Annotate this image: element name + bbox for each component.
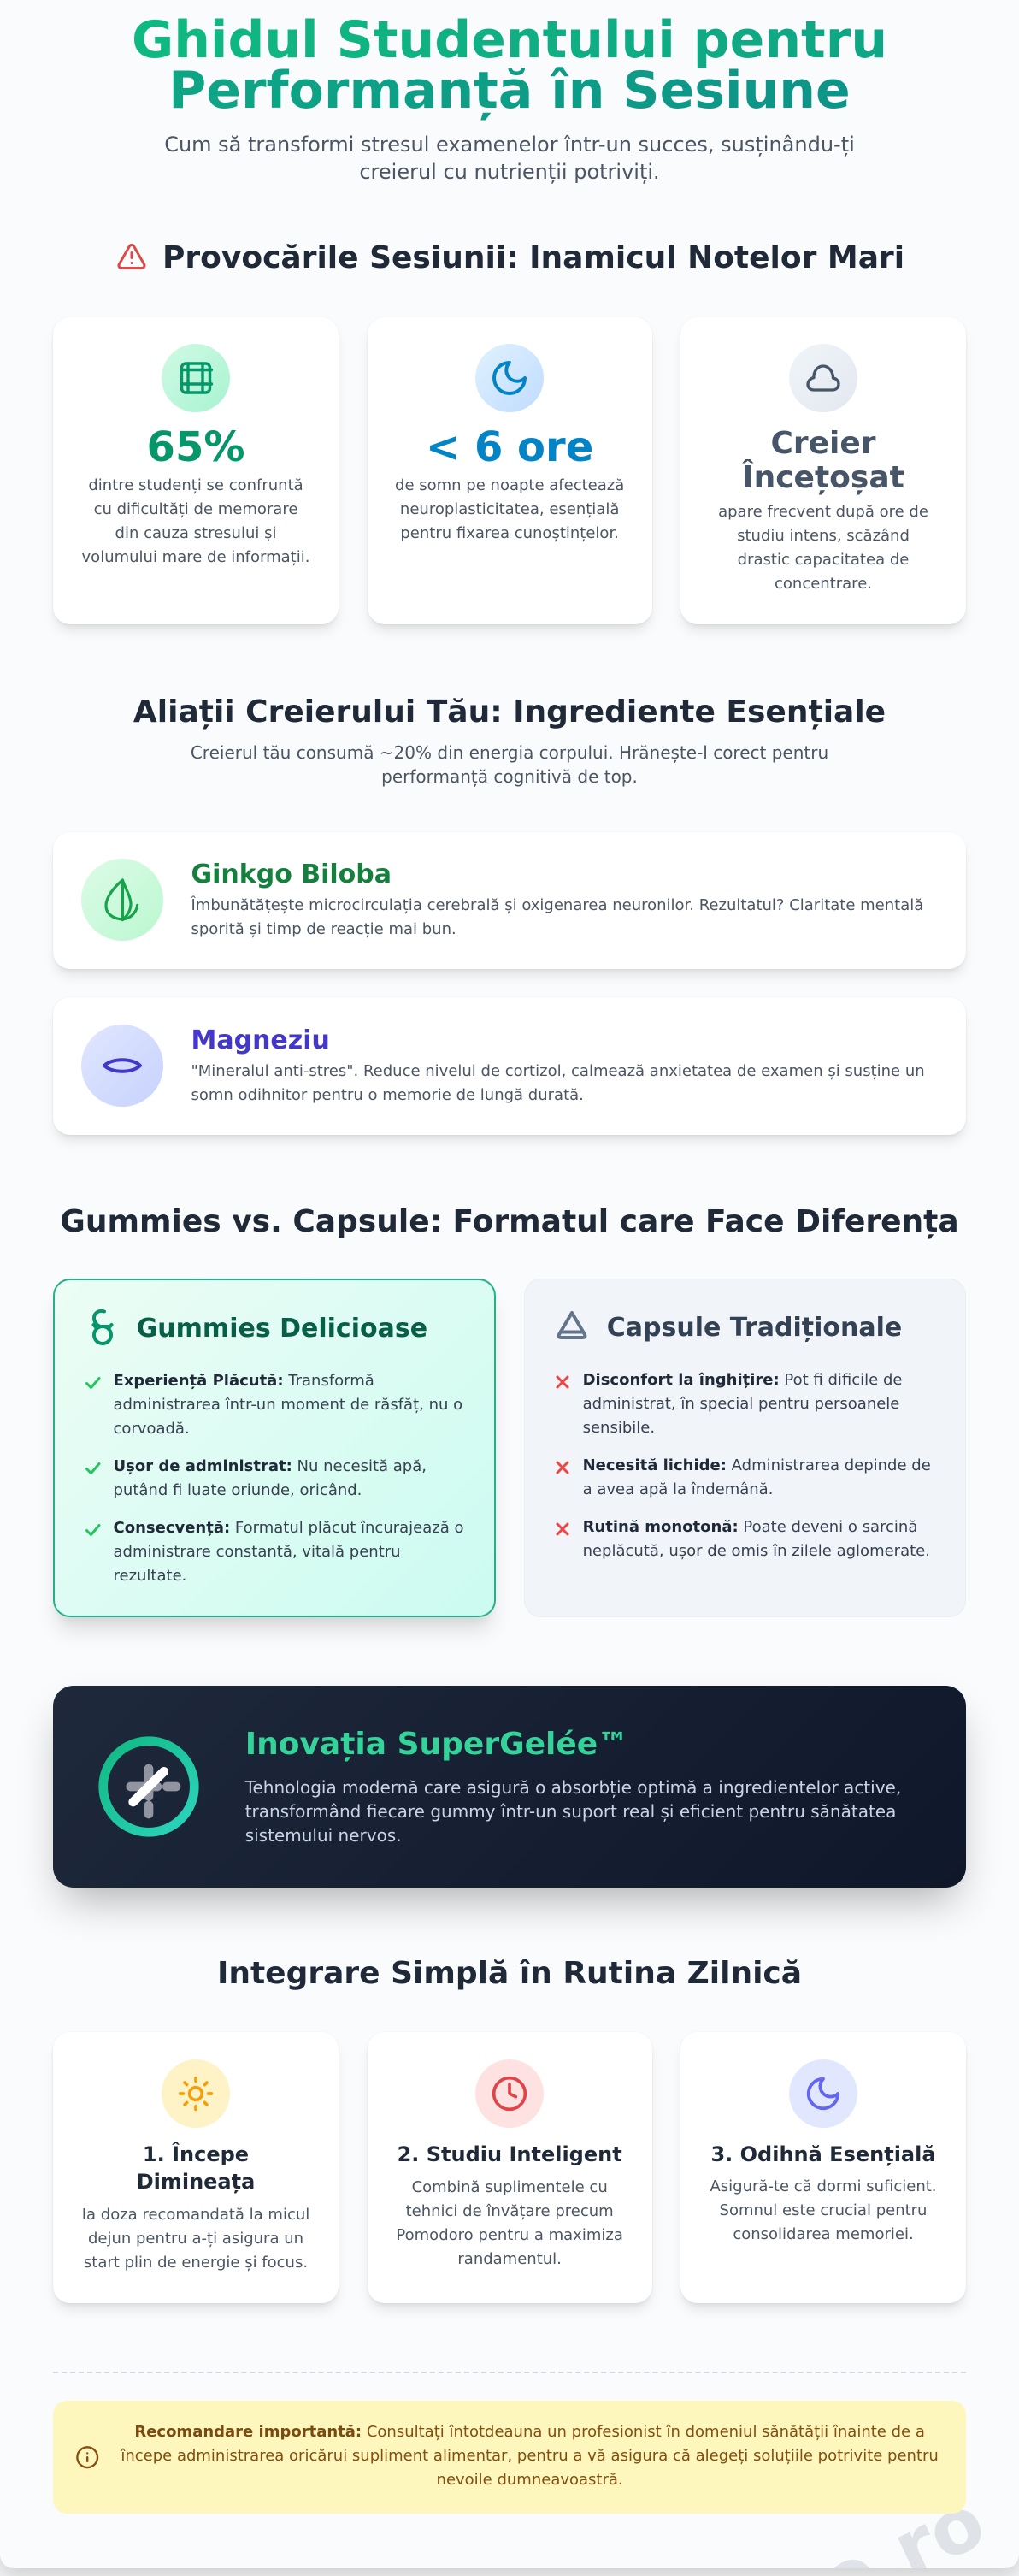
step description: Asigură-te că dormi suficient. xyxy=(710,2177,937,2195)
ingredient description: Îmbunătățește microcirculația cerebrală și oxigenarea neuronilor. Rezultatul? Claritate mentală xyxy=(191,896,923,913)
benefit item xyxy=(85,1519,463,1584)
stat description xyxy=(718,503,928,593)
innovation description xyxy=(244,1777,901,1846)
panel: statistic 65% xyxy=(53,317,339,624)
stat description: volumului mare de informații. xyxy=(82,548,309,566)
step description xyxy=(82,2206,309,2272)
drawback item: neplăcută, ușor de omis în zilele aglomerate. xyxy=(583,1542,930,1560)
panel: foggy brain xyxy=(680,317,966,624)
title: Performanță în Sesiune xyxy=(168,61,851,121)
ingredient description xyxy=(191,1062,925,1103)
icon: capsule triangle xyxy=(557,1310,586,1339)
ingredient description: "Mineralul anti-stres". Reduce nivelul de cortizol, calmează anxietatea de examen și susține un xyxy=(191,1062,925,1079)
icon: moon xyxy=(789,2059,857,2128)
stat description xyxy=(82,476,309,566)
benefit item: corvoadă. xyxy=(113,1420,190,1437)
stat description: apare frecvent după ore de xyxy=(718,503,928,521)
drawback item xyxy=(556,1518,930,1560)
benefit item: Ușor de administrat: Nu necesită apă, xyxy=(113,1457,427,1474)
step description: Combină suplimentele cu xyxy=(412,2177,608,2196)
panel: step 3 xyxy=(680,2032,966,2302)
benefit item xyxy=(85,1457,427,1498)
drawback item: a avea apă la îndemână. xyxy=(583,1480,773,1498)
subtitle: Cum să transformi stresul examenelor într-un succes, susținându-ți xyxy=(164,132,855,156)
icon: warning triangle xyxy=(117,244,145,269)
section intro: performanță cognitivă de top. xyxy=(381,766,638,787)
panel: step 1 xyxy=(53,2032,339,2302)
step description xyxy=(396,2177,623,2268)
icon: check xyxy=(85,1524,101,1536)
stat description: din cauza stresului și xyxy=(115,524,276,542)
step title: Dimineața xyxy=(137,2170,255,2194)
step title: 3. Odihnă Esențială xyxy=(710,2142,936,2166)
stat description: neuroplasticitatea, esențială xyxy=(400,500,619,518)
subtitle xyxy=(164,132,855,184)
benefit item: administrarea într-un moment de răsfăț, nu o xyxy=(113,1396,462,1413)
subtitle: creierul cu nutrienții potriviți. xyxy=(359,160,660,184)
benefit item: administrare constantă, vitală pentru xyxy=(113,1543,401,1560)
panel heading: Capsule Tradiționale xyxy=(607,1313,902,1343)
step description: start plin de energie și focus. xyxy=(84,2254,308,2272)
panel: gummies xyxy=(53,1279,496,1617)
icon: cloud in grey circle xyxy=(789,344,857,412)
icon: gummy bear xyxy=(91,1309,114,1345)
stat value: 65% xyxy=(147,423,244,471)
stat description: cu dificultăți de memorare xyxy=(94,500,297,518)
step description: Pomodoro pentru a maximiza xyxy=(396,2225,623,2244)
title: Ghidul Studentului pentru xyxy=(132,10,887,70)
panel: ginkgo biloba xyxy=(53,831,966,969)
stat description: dintre studenți se confruntă xyxy=(88,476,303,494)
icon: leaf xyxy=(81,859,163,941)
stat description: drastic capacitatea de xyxy=(738,551,909,569)
drawback item: Rutină monotonă: Poate deveni o sarcină xyxy=(583,1518,917,1536)
title xyxy=(132,10,887,121)
icon: lens xyxy=(81,1025,163,1107)
step description: tehnici de învățare precum xyxy=(406,2201,614,2220)
icon: cross xyxy=(556,1375,569,1389)
innovation heading: Inovația SuperGelée™ xyxy=(245,1727,628,1762)
icon: sun xyxy=(162,2059,230,2128)
innovation description: Tehnologia modernă care asigură o absorbție optimă a ingredientelor active, xyxy=(245,1777,901,1798)
drawback item: Necesită lichide: Administrarea depinde de xyxy=(583,1456,931,1474)
stat value: Încețoșat xyxy=(742,460,904,494)
icon: cross xyxy=(556,1522,569,1536)
heading: integrare în rutina zilnică: Integrare Simplă în Rutina Zilnică xyxy=(217,1956,802,1991)
panel: inovația supergelée xyxy=(53,1686,966,1888)
stat description: studiu intens, scăzând xyxy=(737,527,910,545)
icon: info xyxy=(76,2446,99,2468)
benefit item: rezultate. xyxy=(113,1567,186,1584)
callout: important recommendation xyxy=(53,2401,966,2514)
icon: ring with cross xyxy=(98,1736,199,1837)
icon: clock xyxy=(475,2059,544,2128)
drawback item: Disconfort la înghițire: Pot fi dificile de xyxy=(583,1371,902,1389)
ingredient name: Magneziu xyxy=(191,1025,330,1055)
ingredient description: sporită și timp de reacție mai bun. xyxy=(191,920,456,937)
benefit item: Consecvență: Formatul plăcut încurajează o xyxy=(113,1519,463,1536)
icon: check xyxy=(85,1462,101,1474)
panel: capsule xyxy=(524,1279,966,1617)
innovation description: sistemului nervos. xyxy=(245,1825,402,1846)
icon: check xyxy=(85,1377,101,1389)
step description: consolidarea memoriei. xyxy=(733,2225,914,2243)
icon: grid in green circle xyxy=(162,344,230,412)
stat value: Creier xyxy=(770,426,876,460)
section intro xyxy=(191,742,828,787)
panel: step 2 xyxy=(368,2032,652,2302)
innovation description: transformând fiecare gummy într-un suport real și eficient pentru sănătatea xyxy=(245,1801,896,1822)
stat description: de somn pe noapte afectează xyxy=(395,476,624,494)
benefit item: Experiență Plăcută: Transformă xyxy=(113,1372,374,1389)
stat description: pentru fixarea cunoștințelor. xyxy=(400,524,619,542)
drawback item: administrat, în special pentru persoanele xyxy=(583,1395,899,1413)
icon: cross xyxy=(556,1461,569,1474)
step description: randamentul. xyxy=(457,2249,562,2268)
callout text: Recomandare importantă: Consultați întotdeauna un profesionist în domeniul sănătății înainte de a xyxy=(134,2423,925,2441)
stat description: concentrare. xyxy=(775,575,872,593)
step title xyxy=(137,2142,255,2194)
step description xyxy=(710,2177,937,2243)
drawback item xyxy=(556,1371,902,1437)
heading: aliații creierului: Aliații Creierului Tău: Ingrediente Esențiale xyxy=(133,694,886,729)
callout text xyxy=(121,2423,939,2489)
panel: statistic sleep xyxy=(368,317,652,624)
benefit item xyxy=(85,1372,462,1437)
panel: magneziu xyxy=(53,997,966,1135)
panel heading: Gummies Delicioase xyxy=(137,1314,427,1344)
section intro: Creierul tău consumă ~20% din energia corpului. Hrănește-l corect pentru xyxy=(191,742,828,763)
callout text: nevoile dumneavoastră. xyxy=(437,2471,623,2489)
stat description xyxy=(395,476,624,542)
step title: 2. Studiu Inteligent xyxy=(398,2142,622,2166)
icon: moon in blue circle xyxy=(475,344,544,412)
heading: provocările sesiunii: Provocările Sesiunii: Inamicul Notelor Mari xyxy=(162,240,904,275)
callout text: începe administrarea oricărui supliment alimentar, pentru a vă asigura că alegeți soluțiile potrivite pentru xyxy=(121,2447,939,2465)
step description: Somnul este crucial pentru xyxy=(720,2201,927,2219)
step description: Ia doza recomandată la micul xyxy=(82,2206,309,2224)
drawback item xyxy=(556,1456,931,1498)
step title: 1. Începe xyxy=(143,2142,249,2166)
ingredient name: Ginkgo Biloba xyxy=(191,860,392,889)
drawback item: sensibile. xyxy=(583,1419,655,1437)
ingredient description xyxy=(191,896,923,937)
ingredient description: somn odihnitor pentru o memorie de lungă durată. xyxy=(191,1086,584,1103)
stat value: < 6 ore xyxy=(426,423,593,471)
heading: gummies vs capsule: Gummies vs. Capsule: Formatul care Face Diferența xyxy=(60,1204,959,1238)
stat value xyxy=(742,426,904,494)
benefit item: putând fi luate oriunde, oricând. xyxy=(113,1481,362,1498)
step description: dejun pentru a-ți asigura un xyxy=(88,2230,303,2248)
